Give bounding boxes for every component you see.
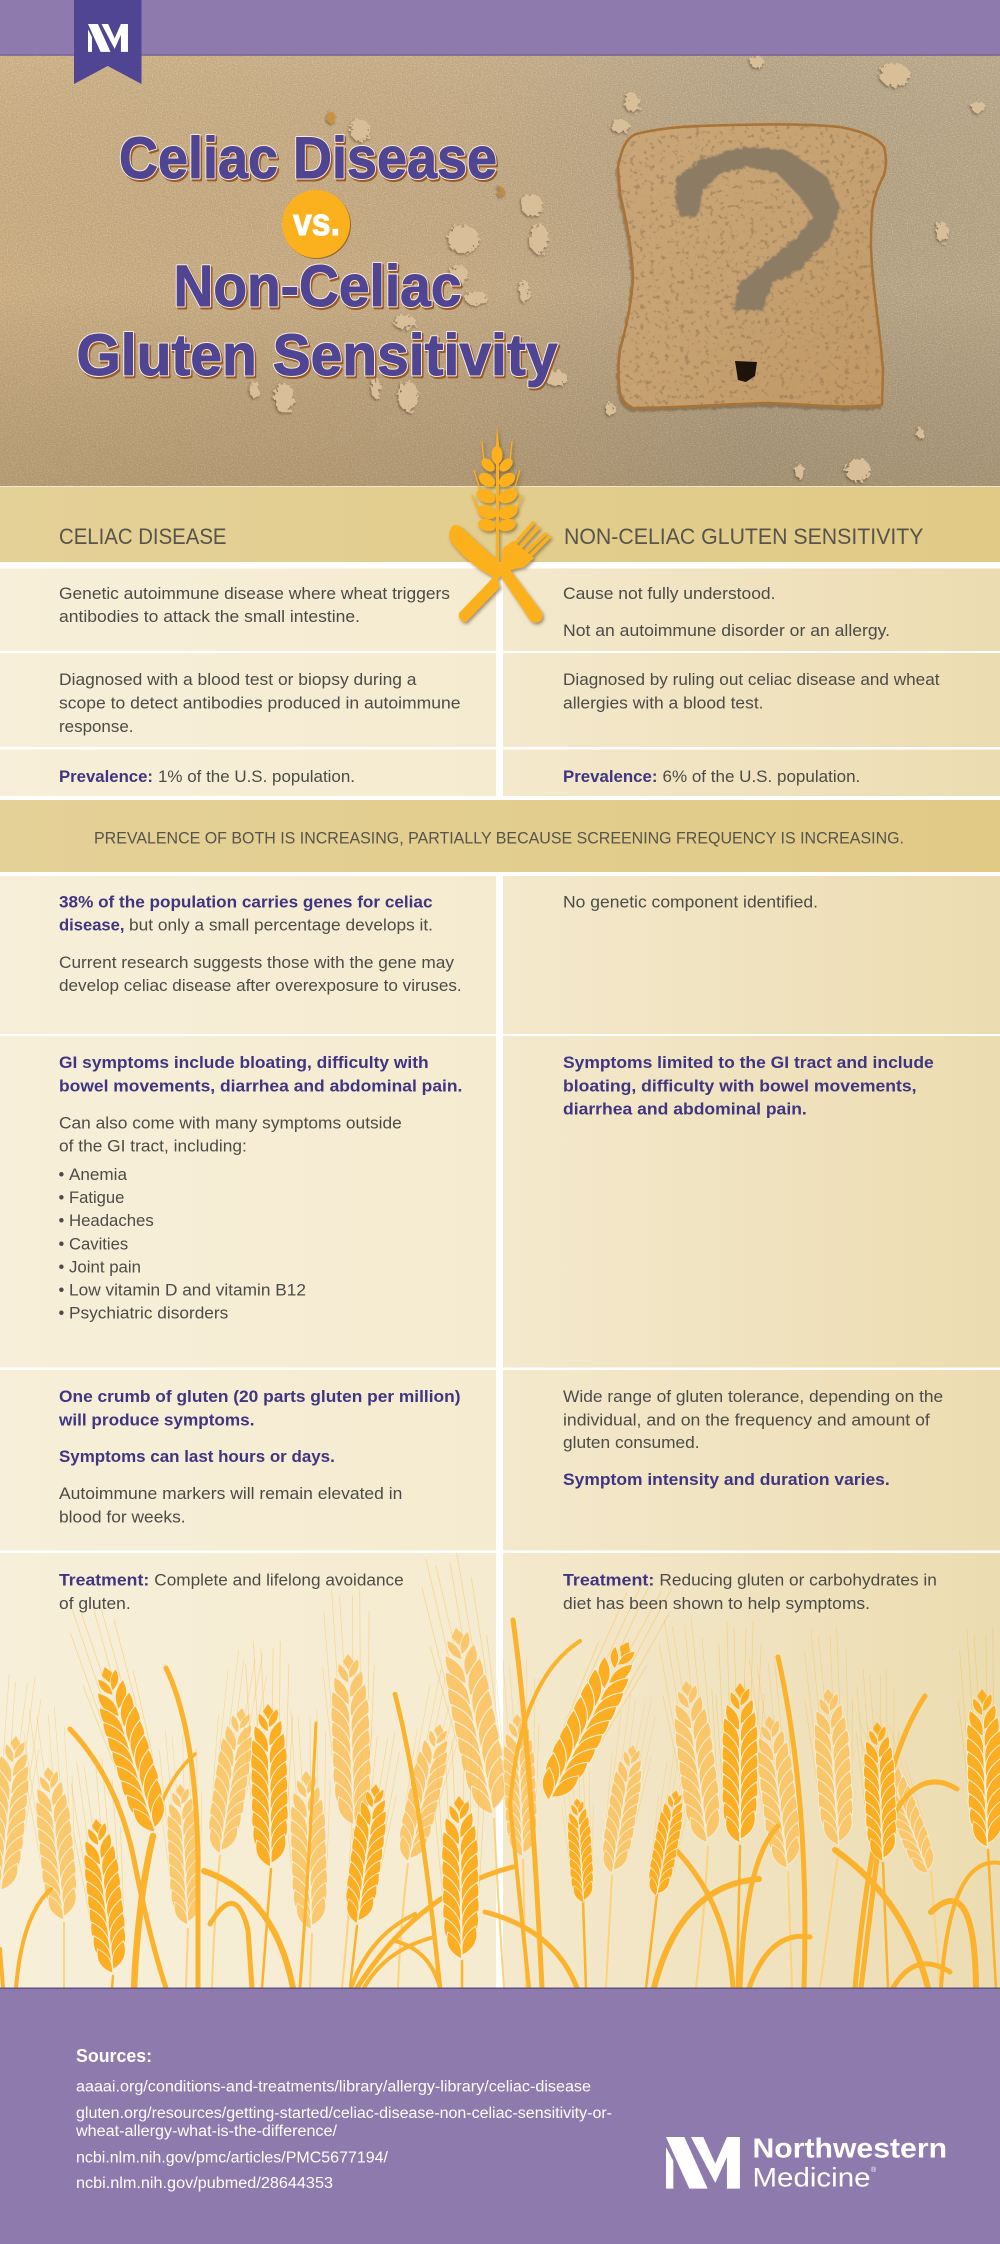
text block: genetics left: but only a small percentage develops it.	[129, 916, 433, 934]
text block: symptoms left: GI symptoms include bloating, difficulty with	[59, 1054, 429, 1072]
title: Non-Celiac	[174, 254, 462, 319]
text block: genetics left: Current research suggests those with the gene may	[59, 954, 455, 972]
vs. badge: vs.	[293, 202, 340, 244]
list: symptoms outside GI tract: Joint pain	[69, 1258, 141, 1276]
text block: symptoms right: diarrhea and abdominal pain.	[563, 1101, 807, 1119]
text block: diagnosis left: response.	[59, 718, 134, 736]
logo: Northwestern Medicine: Northwestern	[752, 2133, 947, 2164]
text block: genetics left: 38% of the population carries genes for celiac	[59, 894, 432, 912]
dark wheat ears	[60, 1569, 1000, 1976]
text block: treatment right: Treatment:	[563, 1572, 654, 1590]
text block: diagnosis left: scope to detect antibodies produced in autoimmune	[59, 694, 460, 712]
list: symptoms outside GI tract: •	[58, 1166, 64, 1184]
text block: gluten exposure left: blood for weeks.	[59, 1508, 186, 1526]
list: symptoms outside GI tract: •	[58, 1212, 64, 1230]
text block: genetics left: disease,	[59, 916, 124, 934]
text block: treatment right: Reducing gluten or carbohydrates in	[659, 1572, 937, 1590]
list: symptoms outside GI tract: Low vitamin D and vitamin B12	[69, 1282, 306, 1300]
illustration: wheat field	[0, 1550, 1000, 1988]
list: source links: aaaai.org/conditions-and-treatments/library/allergy-library/celiac-disease	[76, 2078, 591, 2096]
panel: left column cells	[0, 568, 496, 1988]
list: symptoms outside GI tract: Cavities	[69, 1236, 128, 1254]
text block: prevalence left: 1% of the U.S. population.	[158, 768, 355, 786]
heading: celiac disease: CELIAC DISEASE	[59, 524, 226, 549]
list: source links: gluten.org/resources/getting-started/celiac-disease-non-celiac-sensitivity-or-	[76, 2105, 612, 2122]
text block: treatment left: Complete and lifelong avoidance	[154, 1572, 404, 1590]
light ear stems	[64, 1818, 940, 1988]
text block: prevalence right: Prevalence:	[563, 768, 658, 786]
title: Celiac Disease	[119, 126, 497, 191]
text block: treatment left: of gluten.	[59, 1595, 131, 1613]
text block: diagnosis left	[59, 671, 460, 736]
text block: gluten exposure left: Autoimmune markers will remain elevated in	[59, 1485, 402, 1503]
text block: genetics left: develop celiac disease after overexposure to viruses.	[59, 977, 462, 995]
knife	[449, 525, 507, 579]
list: source links: ncbi.nlm.nih.gov/pubmed/28644353	[76, 2175, 333, 2192]
question mark cut-out	[675, 147, 840, 310]
list: source links: wheat-allergy-what-is-the-difference/	[75, 2123, 338, 2140]
text block: gluten exposure right: gluten consumed.	[563, 1434, 700, 1452]
title: Non-Celiac	[175, 256, 463, 321]
title: Celiac Disease	[119, 126, 497, 191]
text block: treatment right	[563, 1572, 937, 1613]
list: source links: ncbi.nlm.nih.gov/pmc/articles/PMC5677194/	[76, 2150, 389, 2166]
list: symptoms outside GI tract: Headaches	[69, 1212, 154, 1230]
text block: diagnosis left: Diagnosed with a blood test or biopsy during a	[59, 671, 417, 689]
text block: treatment right: diet has been shown to help symptoms.	[563, 1595, 870, 1613]
text block: cause row right: Cause not fully understood.	[563, 585, 776, 603]
text block: symptoms left	[58, 1054, 462, 1323]
vs. badge	[282, 190, 351, 259]
list: symptoms outside GI tract: •	[58, 1189, 64, 1207]
text block: treatment left: Treatment:	[59, 1572, 149, 1590]
banner: prevalence of both: PREVALENCE OF BOTH IS INCREASING, PARTIALLY BECAUSE SCREENING FREQUENCY IS INCREASING.	[94, 830, 904, 848]
text block: gluten exposure left	[58, 1388, 461, 1526]
banner: prevalence of both	[0, 800, 1000, 872]
title: Non-Celiac	[174, 254, 462, 319]
icon: wheat, knife and fork	[449, 425, 549, 623]
panel: footer	[0, 1988, 1000, 2244]
panel: right column cells	[503, 568, 1000, 1988]
bread slice	[610, 120, 895, 415]
text block: cause row right	[563, 585, 890, 640]
title: Gluten Sensitivity	[76, 323, 558, 388]
text block: gluten exposure left: Symptoms can last hours or days.	[59, 1448, 335, 1466]
text block: treatment left	[59, 1572, 404, 1613]
text block: gluten exposure right: individual, and on the frequency and amount of	[563, 1411, 930, 1429]
list: symptoms outside GI tract: •	[58, 1282, 64, 1300]
text block: symptoms left: bowel movements, diarrhea and abdominal pain.	[59, 1078, 462, 1096]
text block: diagnosis right: allergies with a blood test.	[563, 694, 764, 712]
light wheat ears	[0, 1550, 946, 1930]
text block: cause row left: antibodies to attack the small intestine.	[59, 608, 360, 626]
title: Celiac Disease	[120, 128, 498, 193]
list: source links	[75, 2078, 612, 2192]
list: symptoms outside GI tract: Psychiatric disorders	[69, 1305, 228, 1323]
column header band	[0, 486, 1000, 562]
text block: diagnosis right	[563, 671, 940, 712]
text block: prevalence left: Prevalence:	[59, 768, 153, 786]
title: Gluten Sensitivity	[78, 325, 559, 390]
list: symptoms outside GI tract: Fatigue	[69, 1189, 124, 1207]
text block: cause row left	[59, 585, 450, 626]
top purple bar	[0, 0, 1000, 55]
question mark dot	[735, 361, 757, 382]
ribbon with NM logo	[74, 0, 142, 84]
text block: symptoms right	[563, 1054, 934, 1119]
icon: NM mark	[88, 24, 128, 52]
hero photo: linen, crumbs and bread	[0, 55, 1000, 486]
text block: diagnosis right: Diagnosed by ruling out celiac disease and wheat	[563, 671, 940, 689]
list: symptoms outside GI tract: Anemia	[69, 1166, 128, 1184]
list: symptoms outside GI tract: •	[58, 1258, 64, 1276]
logo: Northwestern Medicine: Medicine	[752, 2162, 870, 2192]
title	[76, 126, 559, 390]
list: symptoms outside GI tract: •	[58, 1305, 64, 1323]
heading: sources: Sources:	[76, 2045, 152, 2066]
text block: gluten exposure left: will produce symptoms.	[58, 1411, 255, 1429]
text block: genetics right: No genetic component identified.	[563, 894, 818, 912]
text block: cause row left: Genetic autoimmune disease where wheat triggers	[59, 585, 450, 603]
text block: prevalence right: 6% of the U.S. population.	[662, 768, 860, 786]
list: symptoms outside GI tract: •	[58, 1236, 64, 1254]
text block: symptoms right: bloating, difficulty with bowel movements,	[563, 1078, 916, 1096]
list: symptoms outside GI tract	[58, 1166, 306, 1323]
fork	[459, 574, 500, 622]
title: Gluten Sensitivity	[76, 323, 558, 388]
text block: prevalence right	[563, 768, 860, 786]
heading: non-celiac gluten sensitivity: NON-CELIAC GLUTEN SENSITIVITY	[564, 524, 924, 549]
text block: symptoms right: Symptoms limited to the GI tract and include	[563, 1054, 934, 1072]
text block: gluten exposure left: One crumb of gluten (20 parts gluten per million)	[59, 1388, 461, 1406]
text block: cause row right: Not an autoimmune disorder or an allergy.	[563, 622, 890, 640]
text block: genetics left	[59, 894, 462, 995]
logo: Northwestern Medicine: ®	[871, 2166, 877, 2174]
text block: gluten exposure right: Symptom intensity and duration varies.	[563, 1471, 890, 1489]
text block: prevalence left	[59, 768, 355, 786]
text block: symptoms left: Can also come with many symptoms outside	[59, 1115, 402, 1133]
bread crumbs	[250, 56, 985, 482]
text block: gluten exposure right	[563, 1388, 943, 1489]
logo: Northwestern Medicine	[666, 2133, 947, 2192]
text block: gluten exposure right: Wide range of gluten tolerance, depending on the	[563, 1388, 943, 1406]
stems and leaves	[0, 1620, 1000, 1988]
text block: symptoms left: of the GI tract, including:	[59, 1138, 247, 1156]
